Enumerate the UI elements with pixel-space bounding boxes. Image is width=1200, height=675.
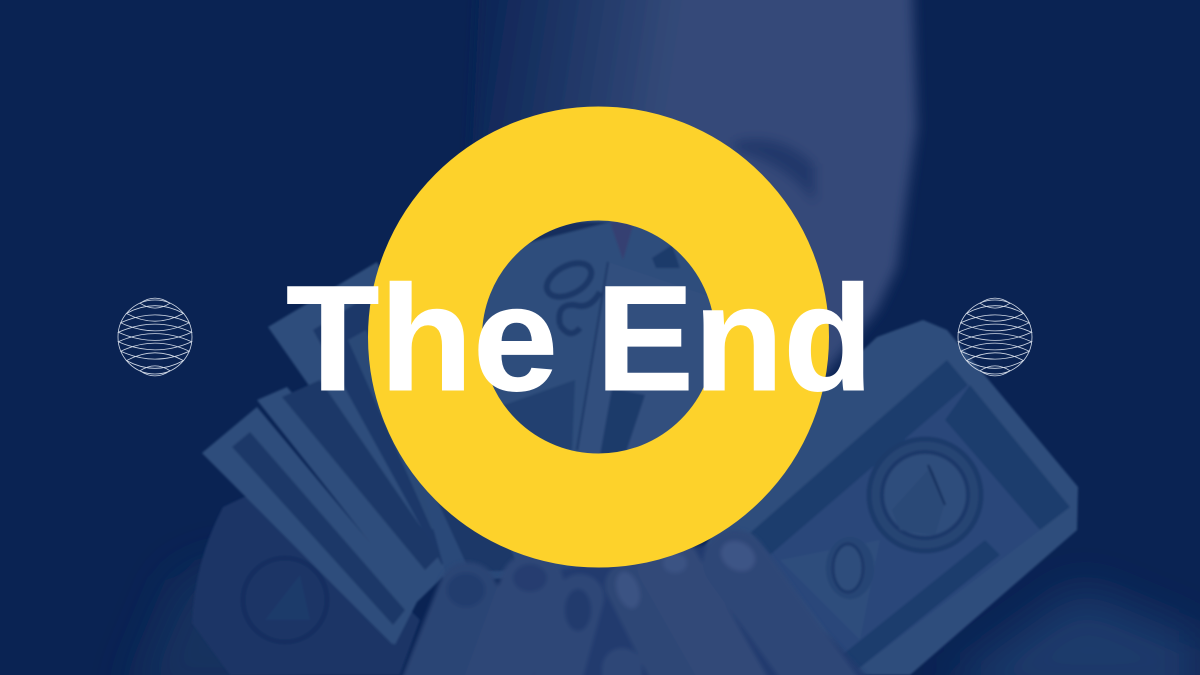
photo: blurred face — [400, 0, 917, 380]
title: The — [286, 254, 558, 422]
title: End — [596, 254, 873, 422]
yellow ring — [425, 164, 772, 510]
icon: right wireframe globe — [958, 298, 1032, 376]
photo: fanned bills, left — [202, 262, 600, 645]
photo: lower-left bill — [192, 480, 420, 675]
photo: fanned bills, right — [700, 320, 1078, 675]
photo: hands and fingers — [400, 535, 880, 675]
photo: blurred shoulders — [130, 560, 1200, 675]
icon: left wireframe globe — [118, 298, 192, 376]
photo: euro notes, centre — [480, 215, 720, 460]
